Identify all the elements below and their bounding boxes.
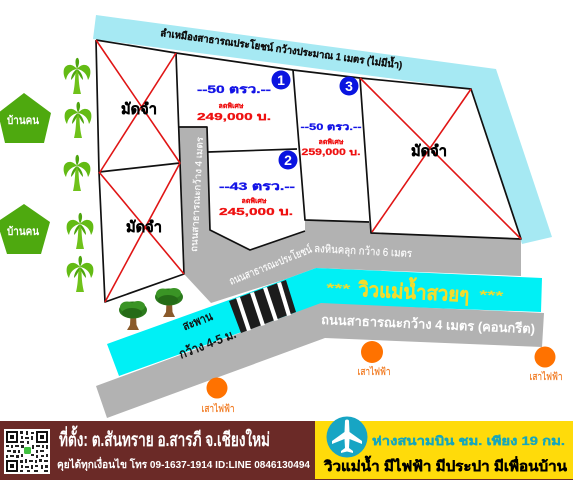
footer panel: highlights — [315, 416, 573, 480]
footer panel: location — [0, 421, 315, 480]
road label: 6 m road, rising part: ถนนสาธารณะประโยชน์ — [227, 242, 314, 288]
lot 3 details — [300, 122, 362, 157]
lot 3 details: 259,000 บ. — [302, 147, 360, 157]
river view label: *** — [326, 280, 352, 296]
reserved label: bottom left plot: มัดจำ — [126, 219, 162, 236]
power pole: middle — [358, 341, 390, 378]
palm trees column — [64, 58, 93, 292]
trees beside bridge — [119, 288, 183, 330]
road label: 6 m road, level part: ลงหินคลุก กว้าง 6 เมตร — [314, 243, 412, 260]
canal: public waterway — [93, 15, 552, 244]
river view label: วิวแม่น้ำสวยๆ — [357, 274, 470, 307]
location heading: ที่ตั้ง: ต.สันทราย อ.สารภี จ.เชียงใหม่ — [59, 425, 270, 451]
concrete road: lower gray road — [96, 303, 544, 418]
lot 1 details: --50 ตรว.-- — [197, 84, 271, 96]
river view label: *** — [479, 287, 505, 303]
plot outlines — [96, 40, 521, 302]
canal label: ลำเหมืองสาธารณประโยชน์ กว้างประมาณ 1 เมตร (ไม่มีน้ำ) — [160, 25, 403, 72]
QR code — [4, 429, 50, 474]
reserved label: top left plot: มัดจำ — [121, 101, 157, 118]
power pole: left — [202, 378, 234, 415]
lot 2 details — [219, 181, 295, 218]
lot 2 details: ลดพิเศษ — [242, 197, 267, 205]
lot 1 details: ลดพิเศษ — [219, 102, 244, 110]
airport distance text: ห่างสนามบิน ชม. เพียง 19 กม. — [372, 434, 565, 448]
house marker: upper: บ้านคน — [7, 114, 39, 127]
badge 2 — [278, 150, 298, 170]
reserved label: right plot: มัดจำ — [411, 143, 447, 160]
bridge label — [177, 309, 238, 362]
amenities text: วิวแม่น้ำ มีไฟฟ้า มีประปา มีเพื่อนบ้าน — [323, 455, 567, 474]
badge 3: 3 — [345, 78, 353, 94]
crosswalk: bridge stripes — [229, 280, 296, 333]
contact line: คุยได้ทุกเงื่อนไข โทร 09-1637-1914 ID:LINE 0846130494 — [57, 456, 310, 472]
road label: 4 m concrete road: ถนนสาธารณะกว้าง 4 เมตร (คอนกรีต) — [321, 312, 535, 336]
house marker: upper — [0, 93, 51, 143]
river view label — [326, 274, 505, 307]
river band: turquoise water — [107, 268, 542, 376]
lot 2 details: 245,000 บ. — [219, 206, 293, 218]
icon: airplane — [326, 416, 368, 458]
reserved plot crosses — [96, 40, 521, 302]
bridge label: กว้าง 4-5 ม. — [177, 326, 238, 362]
badge 1 — [272, 70, 290, 90]
power pole: right — [530, 346, 562, 383]
lot 2 details: --43 ตรว.-- — [219, 181, 295, 193]
badge 1: 1 — [277, 72, 285, 88]
badge 3 — [340, 76, 358, 96]
power pole: left: เสาไฟฟ้า — [202, 403, 234, 415]
power pole: right: เสาไฟฟ้า — [530, 371, 562, 383]
lot 3 details: --50 ตรว.-- — [300, 122, 362, 133]
road network: gray access roads — [179, 127, 521, 303]
road label: vertical 4 m road: ถนนสาธารณะกว้าง 4 เมตร — [189, 137, 206, 252]
house marker: lower: บ้านคน — [7, 225, 39, 238]
bridge label: สะพาน — [181, 309, 215, 333]
power pole: middle: เสาไฟฟ้า — [358, 366, 390, 378]
lot 1 details — [197, 84, 271, 123]
lot 1 details: 249,000 บ. — [197, 111, 271, 123]
house marker: lower — [0, 204, 50, 254]
lot 3 details: ลดพิเศษ — [319, 138, 344, 146]
badge 2: 2 — [284, 152, 292, 168]
